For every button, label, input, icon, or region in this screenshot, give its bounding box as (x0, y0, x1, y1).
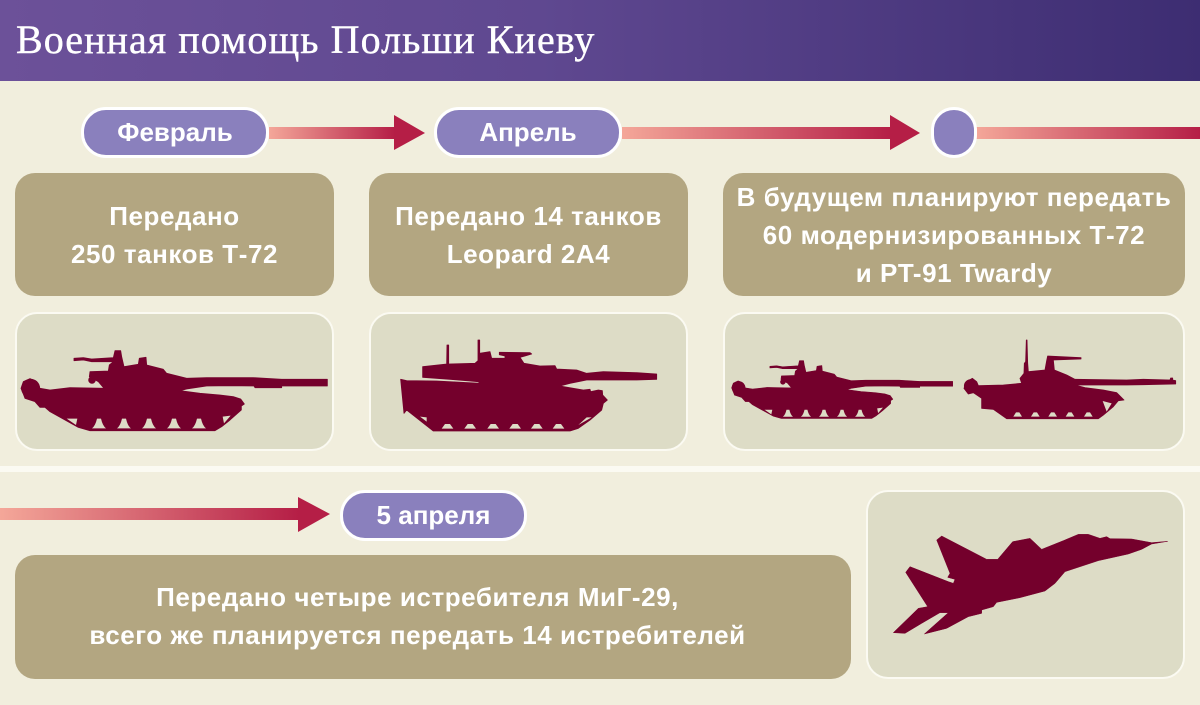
pill: 5 April: 5 апреля (377, 500, 490, 530)
title banner: Военная помощь Польши Киеву (16, 17, 595, 62)
text: February (15, 173, 334, 296)
text: future (723, 173, 1185, 296)
icon: modernized T-72 tank (732, 361, 953, 418)
pill: 5 April (340, 490, 527, 541)
title banner (0, 0, 1200, 81)
text: future: 60 модернизированных Т-72 (763, 220, 1145, 250)
icon: MiG-29 fighter (893, 534, 1168, 634)
pill: April: Апрель (479, 117, 577, 147)
arrow: bottom row (0, 497, 330, 532)
text: MiG-29: всего же планируется передать 14 истребителей (89, 620, 746, 650)
arrow: February to April (269, 115, 425, 150)
panel: T-72 (15, 312, 334, 451)
text: MiG-29 (15, 555, 851, 679)
text: April: Leopard 2A4 (447, 238, 610, 268)
pill: February (81, 107, 269, 158)
panel: Leopard (369, 312, 688, 451)
pill: future marker (931, 107, 977, 158)
panel: MiG-29 (866, 490, 1185, 679)
divider (0, 466, 1200, 472)
text: February: Передано (109, 200, 240, 230)
icon: T-72 tank (21, 351, 327, 431)
icon: Leopard 2A4 tank (401, 340, 657, 431)
pill: February: Февраль (117, 117, 233, 147)
text: future: В будущем планируют передать (737, 182, 1171, 212)
icon: PT-91 Twardy tank (964, 340, 1176, 419)
text: April (369, 173, 688, 296)
panel: future tanks (723, 312, 1185, 451)
pill: April (434, 107, 622, 158)
arrow: April to future (622, 115, 920, 150)
text: April: Передано 14 танков (395, 200, 662, 230)
text: MiG-29: Передано четыре истребителя МиГ-29, (156, 582, 679, 612)
arrow: future continuing (976, 127, 1200, 139)
text: future: и PT-91 Twardy (856, 258, 1052, 288)
text: February: 250 танков Т-72 (71, 238, 278, 268)
